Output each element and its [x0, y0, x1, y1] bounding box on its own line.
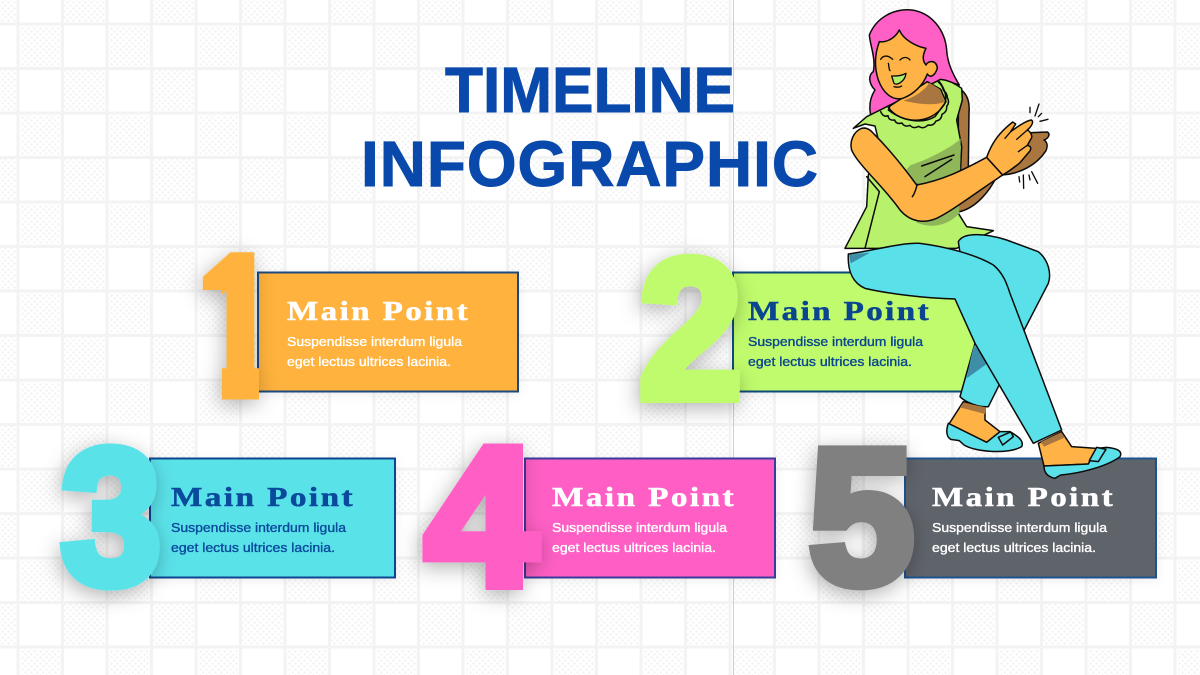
number 2: 2 [639, 218, 742, 440]
panel: point 3 [61, 409, 395, 624]
back arm [958, 87, 997, 212]
panel: point 2 [639, 218, 983, 440]
panel: point 1: eget lectus ultrices lacinia. [287, 354, 451, 369]
face and hand details [881, 56, 1048, 188]
back foot [948, 402, 1000, 442]
back hand [1002, 132, 1049, 175]
panel: point 4 [425, 406, 775, 626]
shirt shade [897, 138, 961, 226]
collar ruffle [881, 82, 949, 128]
back leg [958, 235, 1050, 407]
illustration: clapping woman sitting [845, 10, 1121, 478]
legs and shoes [848, 235, 1121, 478]
front arm [851, 128, 1003, 221]
panel: point 4: Suspendisse interdum ligula [552, 520, 728, 535]
face [876, 30, 937, 99]
neck [888, 82, 946, 121]
panel: point 2: Main Point [748, 295, 931, 326]
title: TIMELINE [445, 54, 735, 126]
panel: point 2: Suspendisse interdum ligula [748, 334, 924, 349]
front hand [987, 120, 1033, 175]
panel: point 5: Suspendisse interdum ligula [932, 520, 1108, 535]
panel: point 1 [192, 246, 520, 416]
number 4: 4 [425, 406, 537, 626]
panel: point 5: eget lectus ultrices lacinia. [932, 540, 1096, 555]
panel: point 5 [809, 409, 1156, 624]
hair [869, 10, 959, 115]
upper body [845, 10, 1049, 248]
front leg [848, 243, 1062, 443]
panel: point 3: Suspendisse interdum ligula [171, 520, 347, 535]
front foot [1038, 432, 1097, 466]
number 1: 1 [197, 215, 277, 436]
panel: point 2: eget lectus ultrices lacinia. [748, 354, 912, 369]
number 5: 5 [809, 409, 914, 624]
shirt [845, 79, 993, 248]
panel: point 4: Main Point [552, 481, 736, 512]
title [361, 54, 819, 200]
number 3: 3 [61, 409, 161, 624]
panel: point 5: Main Point [932, 481, 1115, 512]
panel: point 3: eget lectus ultrices lacinia. [171, 540, 335, 555]
panel: point 4: eget lectus ultrices lacinia. [552, 540, 716, 555]
panel: point 1: Suspendisse interdum ligula [287, 334, 463, 349]
panel: point 3: Main Point [171, 481, 355, 512]
panel: point 1: Main Point [287, 295, 470, 326]
title: INFOGRAPHIC [361, 128, 819, 200]
